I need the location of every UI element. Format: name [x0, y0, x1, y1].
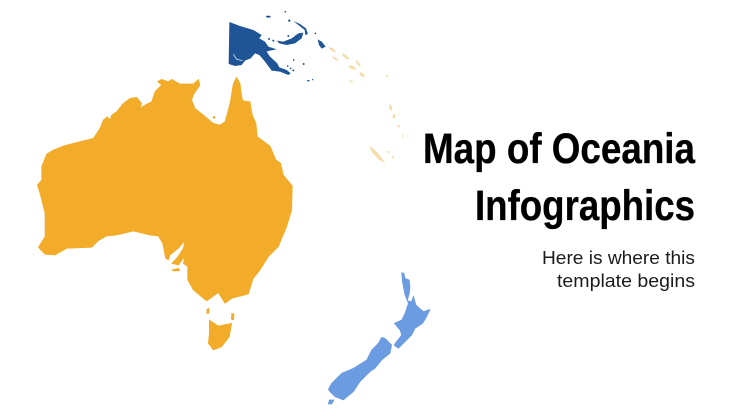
- North Island: [394, 273, 430, 348]
- map: New Zealand: [328, 273, 430, 404]
- subtitle: [542, 247, 695, 291]
- title: [423, 125, 696, 230]
- Kangaroo Island: [172, 268, 180, 271]
- title: Map of Oceania: [423, 125, 696, 173]
- New Ireland: [293, 21, 308, 35]
- river notch: [233, 54, 243, 61]
- Tasmania: [208, 320, 232, 350]
- South Island: [328, 337, 392, 400]
- map: Papua New Guinea: [229, 11, 326, 81]
- title: Infographics: [475, 182, 695, 230]
- small islands: [266, 11, 316, 81]
- Gulf island speck: [213, 116, 215, 118]
- New Britain: [277, 33, 303, 45]
- subtitle: template begins: [557, 270, 695, 291]
- Bougainville: [318, 39, 326, 49]
- map: Solomon Islands, Vanuatu and New Caledonia: [328, 46, 403, 163]
- map: Australia: [37, 77, 292, 350]
- King and Flinders islands: [207, 308, 234, 320]
- subtitle: Here is where this: [542, 247, 695, 268]
- Stewart Island: [328, 400, 334, 404]
